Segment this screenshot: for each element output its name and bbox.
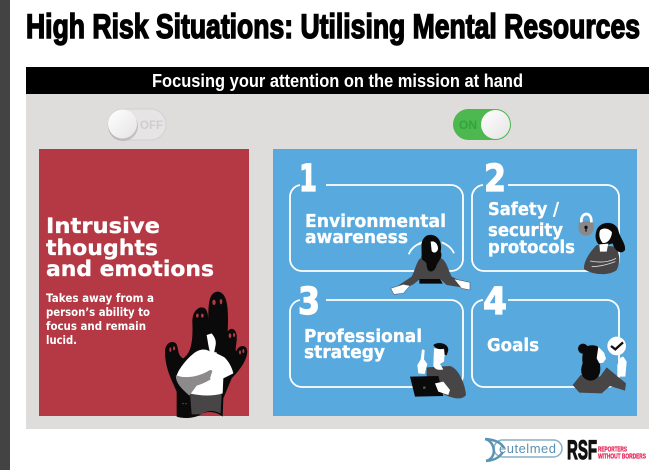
card 3: professional strategy: 3 — [298, 280, 320, 323]
body text: lucid. — [46, 333, 77, 347]
logo: eutelmed — [485, 439, 562, 461]
card 2: safety / security protocols — [472, 157, 625, 274]
toggle: on — [453, 109, 511, 140]
toggle: off — [108, 109, 166, 141]
icon: man with laptop — [410, 343, 466, 398]
card 2: safety / security protocols: protocols — [488, 237, 575, 258]
subtitle banner: Focusing your attention on the mission at hand — [152, 71, 523, 91]
heading: intrusive thoughts: and emotions — [46, 257, 214, 281]
icon: woman with check mark — [573, 337, 627, 393]
body text: focus and remain — [46, 319, 146, 333]
subtitle banner — [26, 67, 649, 94]
logo: eutelmed: eutelmed — [499, 441, 556, 456]
panel: intrusive thoughts — [39, 149, 249, 418]
icon: woman with crossed arms — [584, 223, 625, 274]
toggle: on: ON — [459, 118, 477, 132]
card 1: environmental awareness: awareness — [305, 227, 408, 248]
logo: reporters without borders — [567, 435, 646, 465]
heading: intrusive thoughts: Intrusive — [46, 214, 160, 238]
panel: mental resources — [273, 149, 637, 416]
card 4: goals: 4 — [483, 280, 507, 323]
left edge bar — [0, 0, 10, 470]
icon: padlock — [579, 214, 594, 236]
card 4: goals — [472, 280, 627, 393]
card 1: environmental awareness — [290, 157, 470, 294]
card 2: safety / security protocols: security — [488, 220, 563, 241]
card 3: professional strategy: strategy — [304, 342, 385, 363]
heading: intrusive thoughts: thoughts — [46, 236, 158, 260]
card 4: goals: Goals — [487, 335, 539, 356]
icon: woman with open arms — [391, 235, 470, 294]
card 1: environmental awareness: Environmental — [305, 211, 446, 232]
card 3: professional strategy — [290, 280, 466, 398]
card 3: professional strategy: Professional — [304, 326, 422, 347]
body text — [46, 291, 154, 347]
card 2: safety / security protocols: Safety / — [488, 199, 559, 220]
body text: Takes away from a — [46, 291, 154, 305]
body text: person’s ability to — [46, 305, 150, 319]
toggle: off: OFF — [140, 118, 163, 132]
icon: person with ghosts — [165, 292, 247, 418]
card 2: safety / security protocols: 2 — [484, 157, 506, 200]
logo: reporters without borders: RSF — [567, 435, 597, 465]
main panel background — [26, 94, 649, 429]
logo: reporters without borders: REPORTERS — [598, 444, 627, 454]
card 1: environmental awareness: 1 — [299, 157, 317, 200]
heading: intrusive thoughts — [46, 214, 214, 281]
